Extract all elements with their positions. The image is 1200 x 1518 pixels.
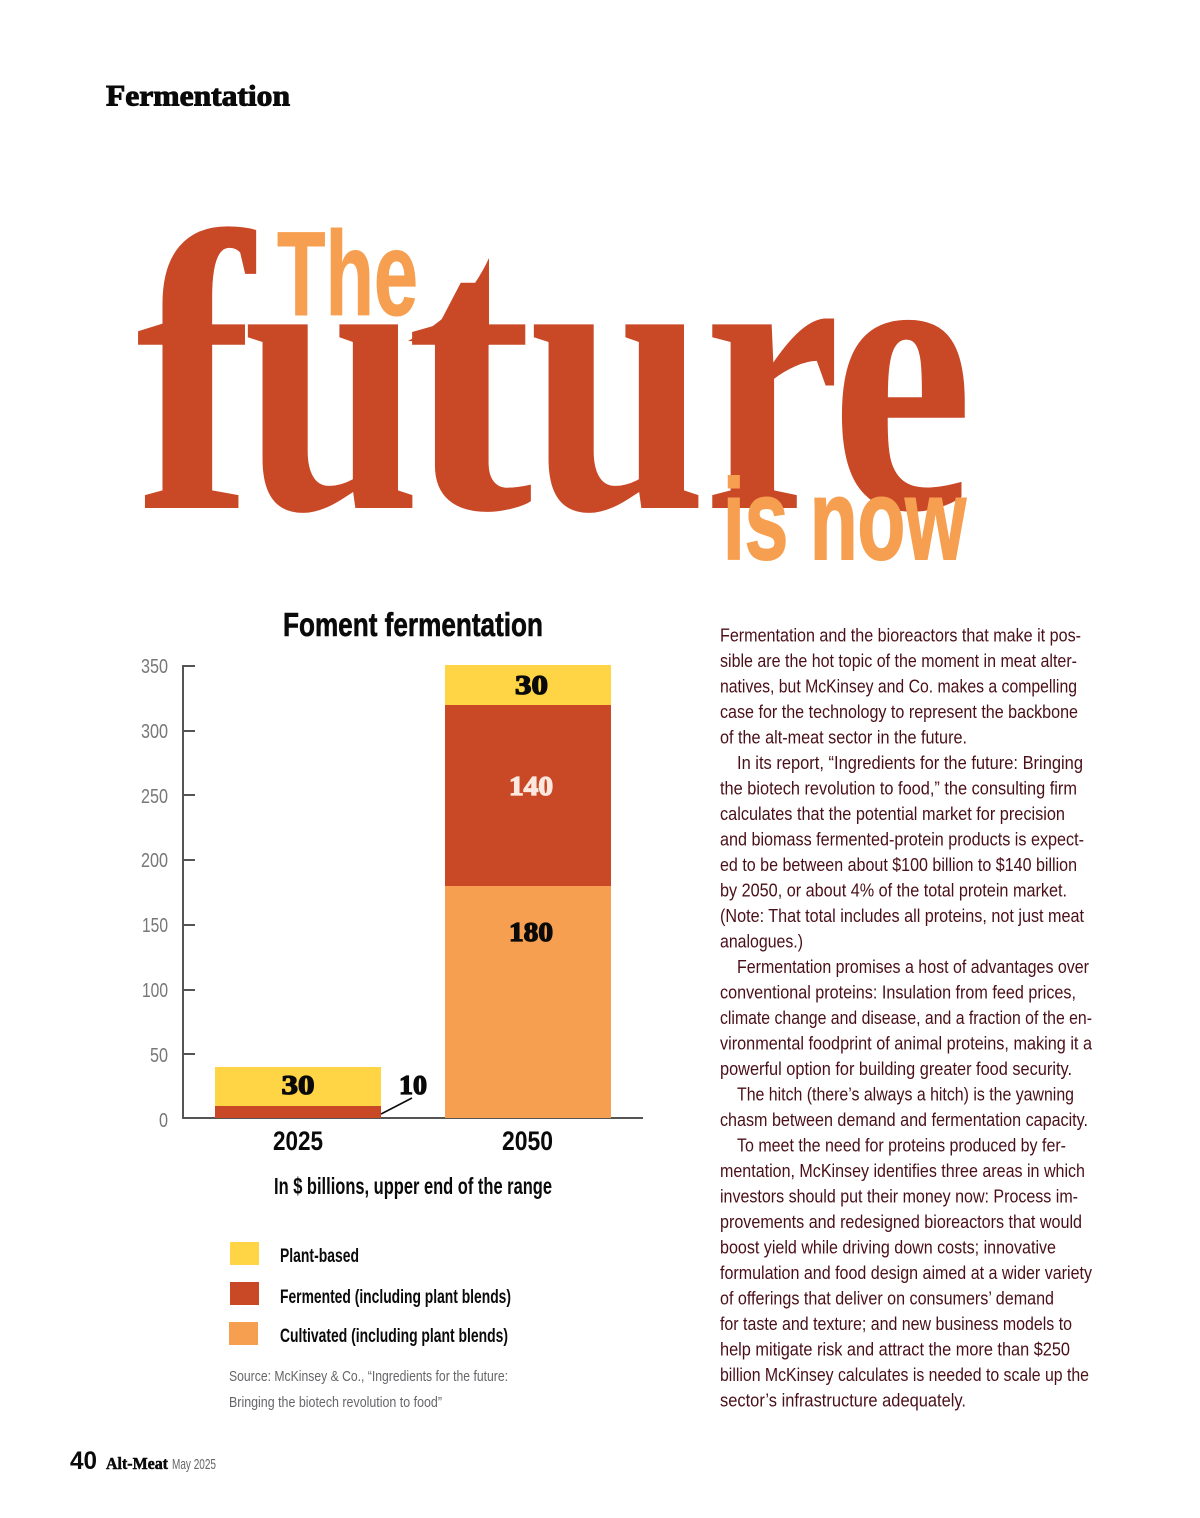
source note: [229, 1369, 508, 1411]
article body text: for taste and texture; and new business models to: [720, 1313, 1072, 1334]
article body text: help mitigate risk and attract the more than $250: [720, 1338, 1070, 1360]
article body text: Fermentation promises a host of advantages over: [737, 956, 1089, 977]
bar: 2025: 30: [282, 1070, 314, 1100]
article body text: vironmental foodprint of animal proteins, making it a: [720, 1032, 1093, 1054]
title word: future: u: [529, 152, 707, 595]
legend: Plant-based: [280, 1246, 359, 1267]
article body text: case for the technology to represent the backbone: [720, 701, 1078, 722]
article body text: climate change and disease, and a fraction of the en-: [720, 1007, 1092, 1028]
y axis: 0: [159, 1110, 168, 1132]
title word: future: f: [136, 152, 256, 595]
bar chart: [141, 656, 643, 1156]
title word: future: t: [406, 152, 537, 595]
article body text: formulation and food design aimed at a wider variety: [720, 1262, 1093, 1283]
title word: future: u: [243, 152, 421, 595]
article body text: (Note: That total includes all proteins, not just meat: [720, 905, 1084, 926]
bar: 2050: 140: [509, 771, 553, 801]
article body text: the biotech revolution to food,” the consulting firm: [720, 778, 1077, 798]
callout: 10: [381, 1070, 427, 1114]
article body text: of offerings that deliver on consumers’ demand: [720, 1288, 1054, 1308]
article body text: chasm between demand and fermentation capacity.: [720, 1109, 1088, 1130]
y axis: 100: [142, 980, 168, 1002]
article body text: The hitch (there’s always a hitch) is the yawning: [737, 1084, 1074, 1104]
y axis: 200: [141, 850, 168, 872]
bar: 2025: [215, 1067, 381, 1118]
article body text: Fermentation and the bioreactors that make it pos-: [720, 624, 1081, 646]
title word: future: [136, 152, 973, 595]
source note: Bringing the biotech revolution to food”: [229, 1395, 442, 1411]
article body text: by 2050, or about 4% of the total protein market.: [720, 880, 1067, 900]
y axis: 150: [142, 915, 168, 937]
chart heading: Foment fermentation: [283, 606, 543, 643]
bar: 2050: 30: [515, 670, 548, 700]
section label: Fermentation: Fermentation: [106, 80, 290, 112]
article body text: ed to be between about $100 billion to $140 billion: [720, 854, 1077, 875]
article body text: calculates that the potential market for precision: [720, 803, 1065, 824]
legend: Cultivated (including plant blends): [280, 1326, 508, 1347]
article body text: powerful option for building greater food security.: [720, 1058, 1072, 1079]
y axis: 300: [141, 721, 168, 743]
article body text: In its report, “Ingredients for the future: Bringing: [737, 752, 1083, 773]
article body text: provements and redesigned bioreactors that would: [720, 1211, 1082, 1232]
y axis: 350: [141, 656, 168, 678]
article body text: investors should put their money now: Process im-: [720, 1186, 1078, 1206]
y axis: 250: [141, 786, 168, 808]
title word: future: e: [831, 152, 973, 595]
chart subtitle: In $ billions, upper end of the range: [274, 1173, 552, 1199]
source note: Source: McKinsey & Co., “Ingredients for the future:: [229, 1369, 508, 1385]
article body text: sible are the hot topic of the moment in meat alter-: [720, 650, 1077, 671]
page footer: [70, 1447, 216, 1475]
article body text: conventional proteins: Insulation from feed prices,: [720, 982, 1076, 1002]
x axis labels: 2025: [273, 1126, 323, 1156]
bar: 2050: [445, 665, 611, 1118]
bar: 2050: 180: [509, 917, 553, 947]
article body text: boost yield while driving down costs; innovative: [720, 1236, 1056, 1258]
article body text: and biomass fermented-protein products is expect-: [720, 828, 1084, 850]
x axis labels: [273, 1126, 553, 1156]
x axis labels: 2050: [502, 1126, 553, 1156]
article body text: [720, 624, 1093, 1410]
article body text: natives, but McKinsey and Co. makes a compelling: [720, 676, 1077, 696]
callout: 10: 10: [399, 1070, 427, 1100]
article body text: mentation, McKinsey identifies three areas in which: [720, 1160, 1085, 1181]
article body text: To meet the need for proteins produced by fer-: [737, 1134, 1066, 1156]
article body text: sector’s infrastructure adequately.: [720, 1390, 966, 1410]
title words: is now: is now: [723, 457, 966, 584]
title: [136, 152, 973, 595]
article body text: of the alt-meat sector in the future.: [720, 726, 967, 748]
title word: future: r: [704, 153, 841, 595]
y axis: [141, 656, 643, 1132]
article body text: analogues.): [720, 930, 803, 952]
y axis: 50: [150, 1045, 168, 1067]
legend: [229, 1242, 511, 1347]
article body text: billion McKinsey calculates is needed to scale up the: [720, 1364, 1089, 1385]
legend: Fermented (including plant blends): [280, 1287, 511, 1308]
title word: The: The: [277, 207, 418, 341]
page footer: 40: [70, 1447, 97, 1475]
page footer: Alt-Meat: [106, 1454, 168, 1473]
page footer: May 2025: [172, 1456, 216, 1473]
